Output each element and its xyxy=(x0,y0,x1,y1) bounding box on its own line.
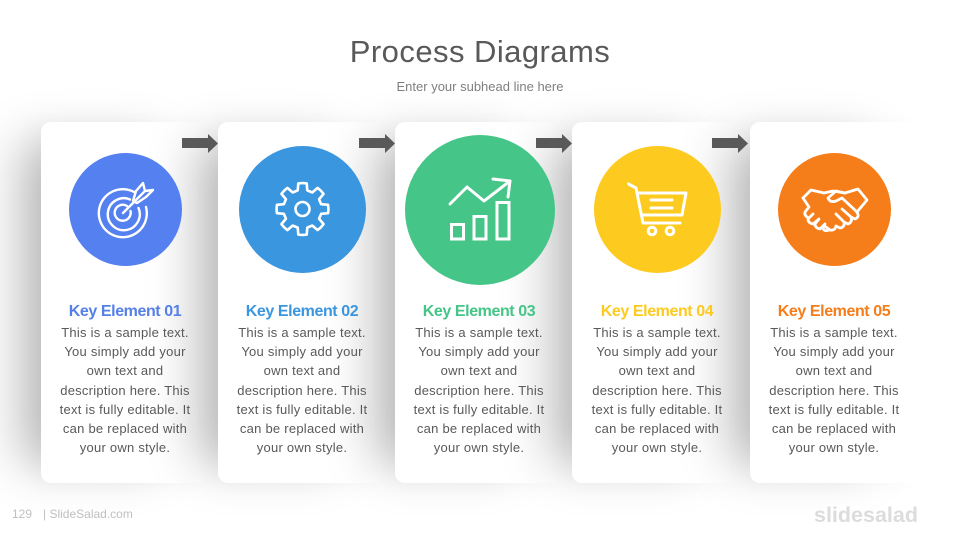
text 2 xyxy=(236,325,367,455)
icon: shopping cart xyxy=(628,184,686,235)
text 1: This is a sample text. xyxy=(61,325,189,340)
text 5: This is a sample text. xyxy=(770,325,898,340)
text 5 xyxy=(768,325,899,455)
icon: target xyxy=(99,183,153,237)
heading 2: Key Element 02 xyxy=(246,303,358,320)
circle 3 xyxy=(405,135,555,285)
icon: handshake xyxy=(803,189,867,231)
text 5: your own style. xyxy=(789,440,879,455)
text 3: own text and xyxy=(441,363,517,378)
text 1: own text and xyxy=(87,363,163,378)
text 3: You simply add your xyxy=(418,344,540,359)
text 4: description here. This xyxy=(592,383,722,398)
text 2: This is a sample text. xyxy=(238,325,366,340)
panel: card 5 xyxy=(750,122,928,483)
panel: card 4 xyxy=(572,122,750,483)
heading 5: Key Element 05 xyxy=(778,303,890,320)
text 3: can be replaced with xyxy=(417,421,541,436)
panel: card 2 xyxy=(218,122,396,483)
text 1: text is fully editable. It xyxy=(60,402,190,417)
heading 3: Key Element 03 xyxy=(423,303,535,320)
subhead: Enter your subhead line here xyxy=(397,79,563,94)
text 1 xyxy=(60,325,190,455)
heading 1: Key Element 01 xyxy=(69,303,181,320)
text 2: description here. This xyxy=(237,383,367,398)
text 4: text is fully editable. It xyxy=(592,402,722,417)
arrow 1 xyxy=(182,134,218,153)
text 2: You simply add your xyxy=(241,344,363,359)
text 3: This is a sample text. xyxy=(415,325,543,340)
arrow 4 xyxy=(712,134,748,153)
text 3: text is fully editable. It xyxy=(414,402,544,417)
arrow 3 xyxy=(536,134,572,153)
text 1: your own style. xyxy=(80,440,170,455)
circle 2 xyxy=(239,146,366,273)
circle 4 xyxy=(594,146,721,273)
text 2: own text and xyxy=(264,363,340,378)
footer: page number: 129 xyxy=(12,507,32,521)
text 3: description here. This xyxy=(414,383,544,398)
text 2: text is fully editable. It xyxy=(237,402,367,417)
text 4: can be replaced with xyxy=(595,421,719,436)
text 5: You simply add your xyxy=(773,344,895,359)
text 4: You simply add your xyxy=(596,344,718,359)
circle 5 xyxy=(778,153,891,266)
text 5: can be replaced with xyxy=(772,421,896,436)
text 5: description here. This xyxy=(769,383,899,398)
heading 4: Key Element 04 xyxy=(601,303,713,320)
panel: card 1 xyxy=(41,122,219,483)
title: Process Diagrams xyxy=(350,34,610,69)
text 1: can be replaced with xyxy=(63,421,187,436)
text 3 xyxy=(414,325,544,455)
text 1: description here. This xyxy=(60,383,190,398)
icon: growth chart xyxy=(450,179,510,239)
circle 1 xyxy=(69,153,182,266)
logo: slidesalad xyxy=(814,503,918,527)
text 4: This is a sample text. xyxy=(593,325,721,340)
text 4 xyxy=(592,325,722,455)
text 1: You simply add your xyxy=(64,344,186,359)
text 5: own text and xyxy=(796,363,872,378)
icon: gear xyxy=(277,183,328,235)
arrow 2 xyxy=(359,134,395,153)
text 4: own text and xyxy=(619,363,695,378)
text 2: can be replaced with xyxy=(240,421,364,436)
text 5: text is fully editable. It xyxy=(769,402,899,417)
panel: card 3 xyxy=(395,122,573,483)
text 2: your own style. xyxy=(257,440,347,455)
text 3: your own style. xyxy=(434,440,524,455)
footer: site: | SlideSalad.com xyxy=(43,507,133,521)
text 4: your own style. xyxy=(612,440,702,455)
